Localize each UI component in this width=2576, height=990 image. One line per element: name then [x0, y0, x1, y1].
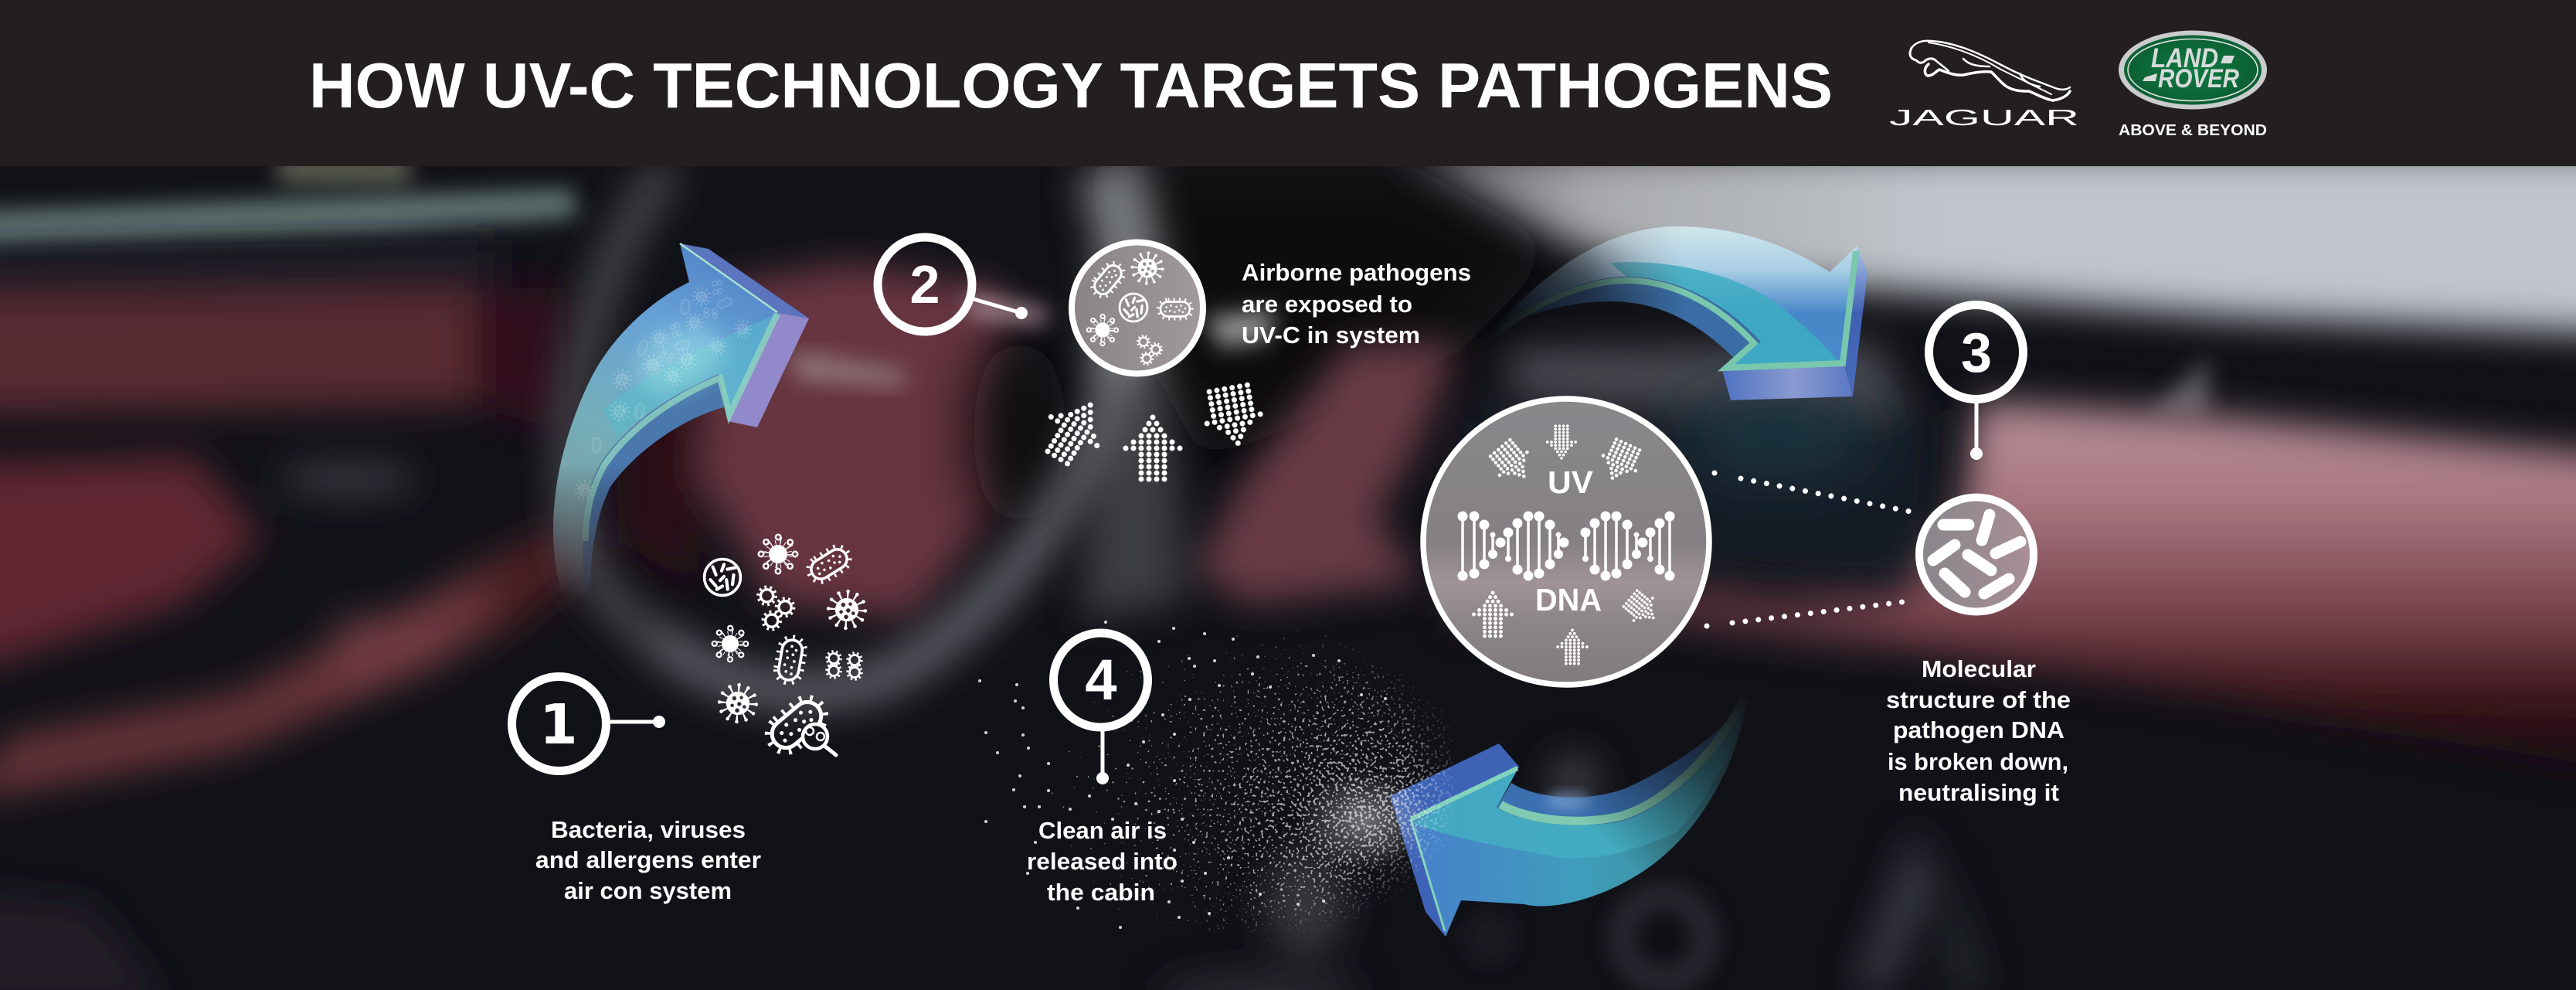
step 2 caption: Airborne pathogens: [1242, 259, 1471, 286]
step 2 caption: are exposed to: [1242, 291, 1412, 318]
step 3 caption: is broken down,: [1888, 748, 2068, 775]
logo: Land Rover: ABOVE & BEYOND: [2119, 122, 2267, 139]
step 3 caption: [1886, 655, 2071, 806]
step 4 caption: Clean air is: [1038, 817, 1167, 844]
step 3 caption: pathogen DNA: [1893, 716, 2065, 743]
step 1 caption: air con system: [564, 877, 732, 904]
step 3 caption: Molecular: [1922, 655, 2036, 682]
header bar: [0, 0, 2576, 166]
step 1 caption: and allergens enter: [535, 846, 761, 873]
logo: Jaguar: JAGUAR: [1889, 106, 2079, 131]
step 4 number badge: [1054, 633, 1148, 784]
dotted airflow arrows: [1035, 383, 1265, 479]
step 2 pathogen circle: [1072, 243, 1203, 374]
step 3 bacteria circle: [1919, 498, 2034, 612]
step 1 caption: Bacteria, viruses: [551, 816, 746, 843]
DNA helix: [1457, 512, 1675, 581]
logo: Land Rover: ROVER: [2158, 64, 2239, 94]
step 1 number badge: 1: [539, 692, 578, 757]
clean air particle spray: [974, 611, 1453, 943]
arrow 1: rising curved arrow: [553, 243, 809, 603]
UV arrows: [1474, 426, 1663, 664]
title: HOW UV-C TECHNOLOGY TARGETS PATHOGENS: [309, 49, 1833, 121]
step 1 caption: [535, 816, 761, 904]
step 2 caption: [1242, 259, 1471, 349]
UV DNA circle: [1423, 399, 1709, 685]
logo: Jaguar: [1889, 41, 2079, 131]
step 1 pathogen icon cluster: [705, 537, 866, 758]
step 2 number badge: 2: [910, 254, 940, 315]
arrow 3: returning arrow to cabin: [1390, 698, 1748, 937]
step 4 caption: released into: [1027, 848, 1178, 875]
step 4 caption: [1027, 817, 1178, 906]
step 1 number badge: [511, 677, 665, 771]
arrow 2: arcing arrow to DNA: [1489, 226, 1867, 400]
logo: Land Rover: LAND: [2151, 43, 2218, 73]
logo: Land Rover: [2119, 31, 2267, 139]
step 3 caption: structure of the: [1886, 686, 2071, 713]
step 3 number badge: [1929, 304, 2023, 460]
step 4 number badge: 4: [1085, 648, 1117, 712]
step 2 caption: UV-C in system: [1242, 321, 1420, 349]
step 3 number badge: 3: [1961, 322, 1992, 384]
step 3 caption: neutralising it: [1898, 779, 2059, 806]
step 2 number badge: [878, 237, 1028, 332]
UV label: UV: [1548, 464, 1594, 500]
step 4 caption: the cabin: [1047, 879, 1155, 906]
small pathogen icons on arrow: [574, 280, 752, 500]
dotted connector lines: [1707, 473, 1911, 626]
DNA label: DNA: [1535, 582, 1602, 617]
